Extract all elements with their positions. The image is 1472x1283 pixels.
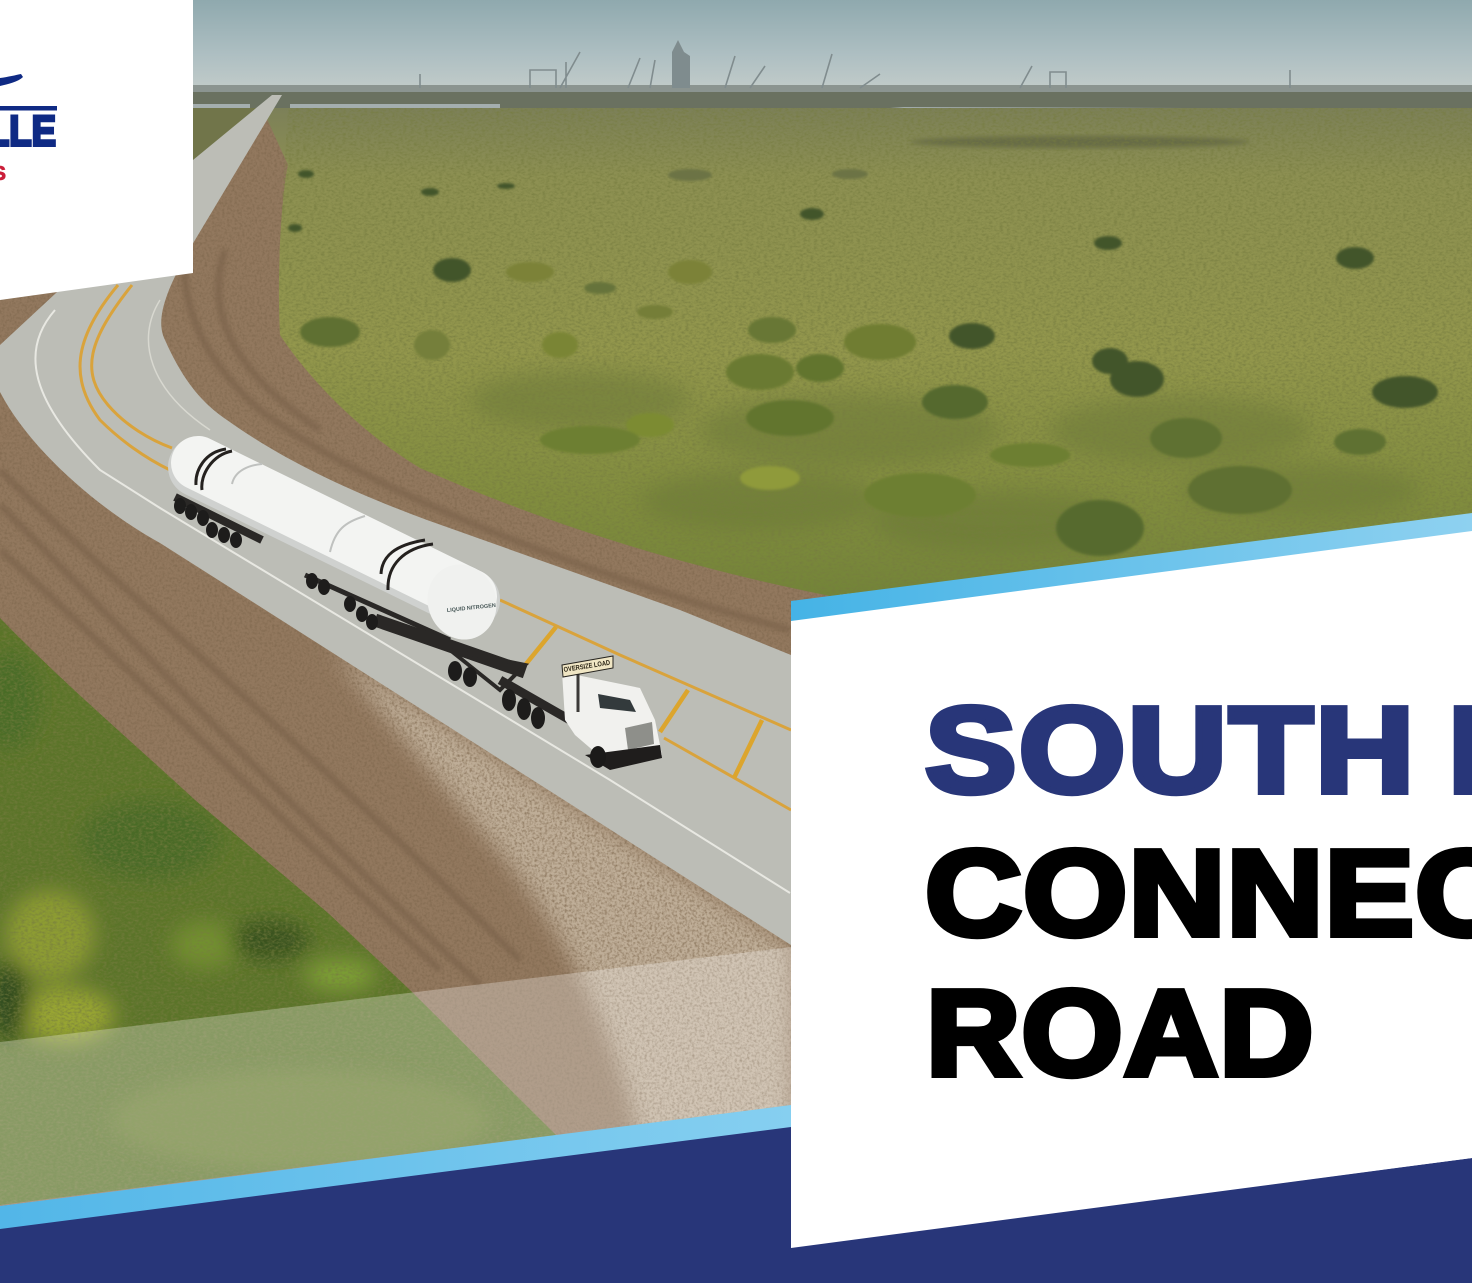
- distant water and flats: [193, 92, 1472, 115]
- light blue accent: lower left: [0, 1105, 791, 1229]
- translucent overlay band: [0, 947, 791, 1206]
- distant port skyline: [193, 40, 1472, 93]
- title panel: [791, 513, 1472, 1248]
- road edge and lane lines: [35, 285, 791, 893]
- white tank: [196, 449, 507, 649]
- grass field: [262, 100, 1472, 600]
- logo swoosh: [0, 74, 23, 86]
- white panel: [791, 530, 1472, 1248]
- light blue accent: panel top: [791, 513, 1472, 621]
- oversize load sign: OVERSIZE LOAD: [563, 660, 611, 674]
- concrete road: [0, 95, 791, 945]
- trailer frames: [175, 497, 570, 720]
- sky: [0, 0, 1472, 92]
- left grass: [0, 610, 560, 1210]
- logo panel: [0, 0, 193, 300]
- logo bar: [0, 106, 57, 110]
- oversize load truck: [174, 449, 662, 770]
- trailer wheels: [174, 498, 545, 729]
- shrubs in field: [288, 169, 1438, 556]
- ground base: [0, 92, 840, 1212]
- title line 3: ROAD: [926, 965, 1315, 1101]
- tank label: LIQUID NITROGEN: [447, 603, 496, 614]
- far left grass beside road: [193, 108, 270, 185]
- dirt texture and tracks: [0, 110, 840, 1220]
- truck cab: [562, 656, 662, 770]
- light gravel beside road: [330, 650, 791, 1140]
- navy base band: [0, 1126, 1472, 1283]
